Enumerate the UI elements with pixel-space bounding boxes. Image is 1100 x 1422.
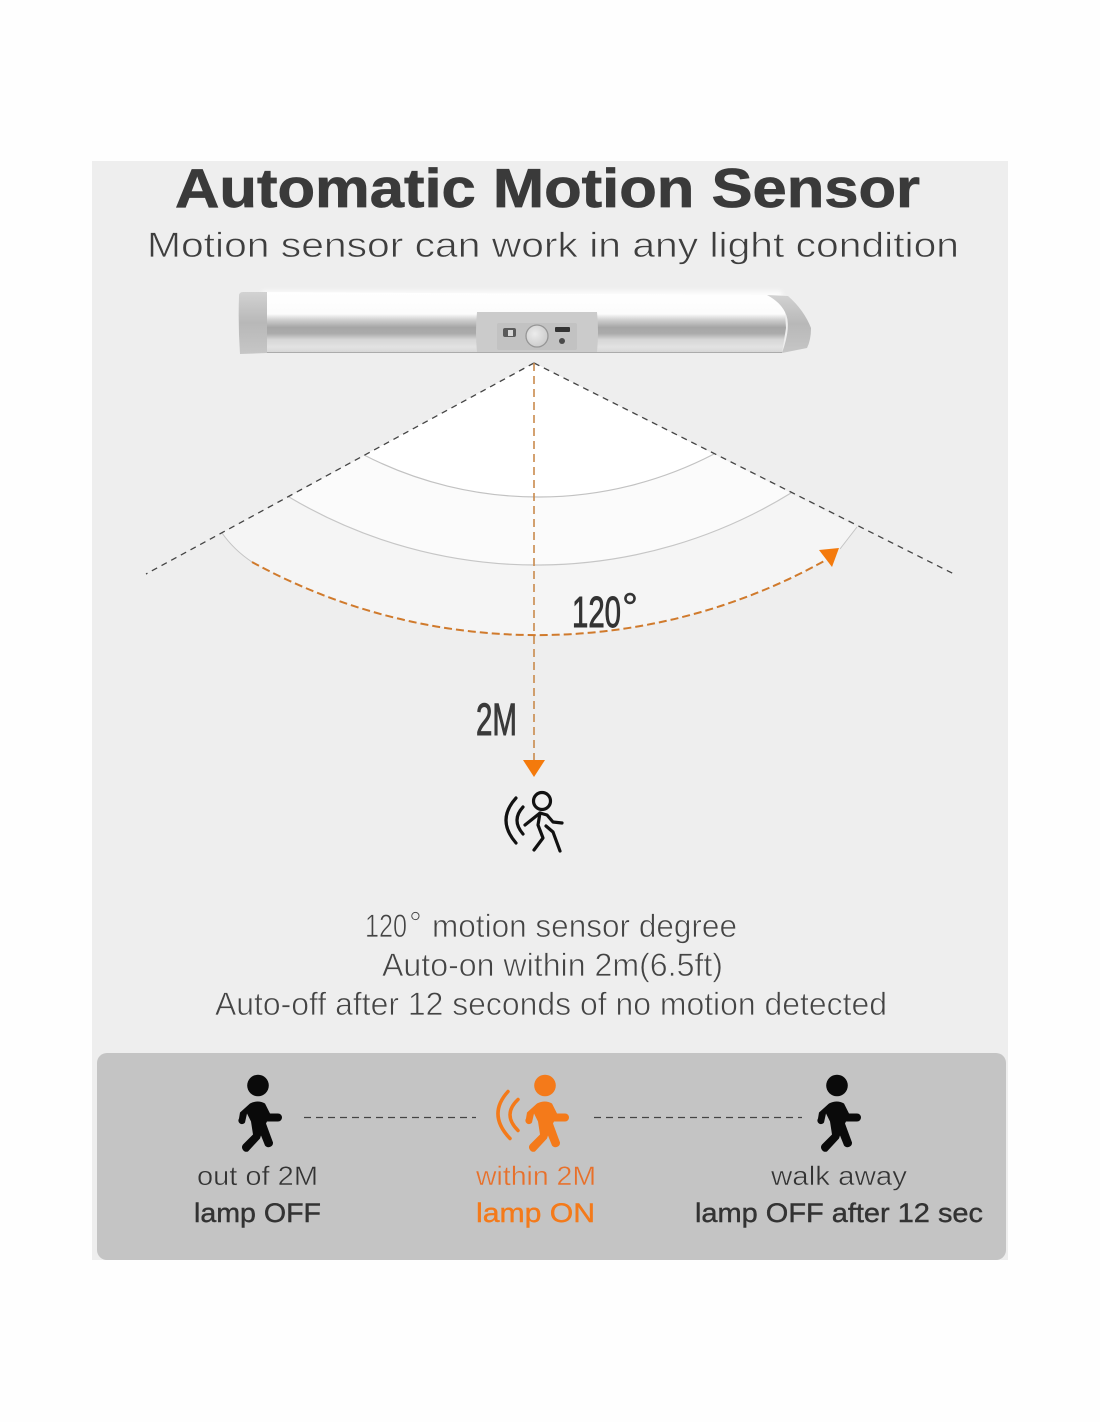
state: out of 2M — [194, 1075, 321, 1228]
light bar product — [239, 291, 811, 354]
title: Automatic Motion Sensor — [175, 157, 920, 219]
description text: Auto-off after 12 seconds of no motion detected — [215, 986, 887, 1022]
icon: person black — [238, 1075, 282, 1152]
state: within 2M: lamp ON — [476, 1198, 595, 1228]
description text: motion sensor degree — [432, 908, 737, 944]
state: walk away: walk away — [770, 1161, 908, 1191]
orange 2M distance arrow — [523, 363, 545, 777]
description text — [215, 905, 887, 1022]
panel: lamp states — [97, 1053, 1006, 1260]
state: within 2M: within 2M — [475, 1161, 596, 1191]
orange 120 degree arc arrow — [252, 548, 839, 635]
label: 120 degrees: 120 — [572, 588, 621, 637]
description text: 120 — [365, 908, 407, 944]
state: out of 2M: out of 2M — [197, 1161, 318, 1191]
subtitle: Motion sensor can work in any light condition — [147, 226, 959, 265]
label: 120 degrees: ° — [622, 586, 638, 630]
state: within 2M — [475, 1075, 596, 1228]
description text: Auto-on within 2m(6.5ft) — [382, 947, 723, 983]
icon: person black walking away — [817, 1075, 861, 1152]
state: out of 2M: lamp OFF — [194, 1198, 321, 1228]
description text: ° — [409, 905, 422, 941]
state: walk away — [695, 1075, 983, 1228]
panel: main background — [92, 161, 1008, 1260]
icon: person orange with waves — [498, 1075, 569, 1152]
sensing zone: detection fan — [146, 363, 954, 635]
icon: walking person outline with motion waves — [506, 792, 562, 851]
state: walk away: lamp OFF after 12 sec — [695, 1198, 983, 1228]
label: 2M: 2M — [476, 694, 517, 745]
